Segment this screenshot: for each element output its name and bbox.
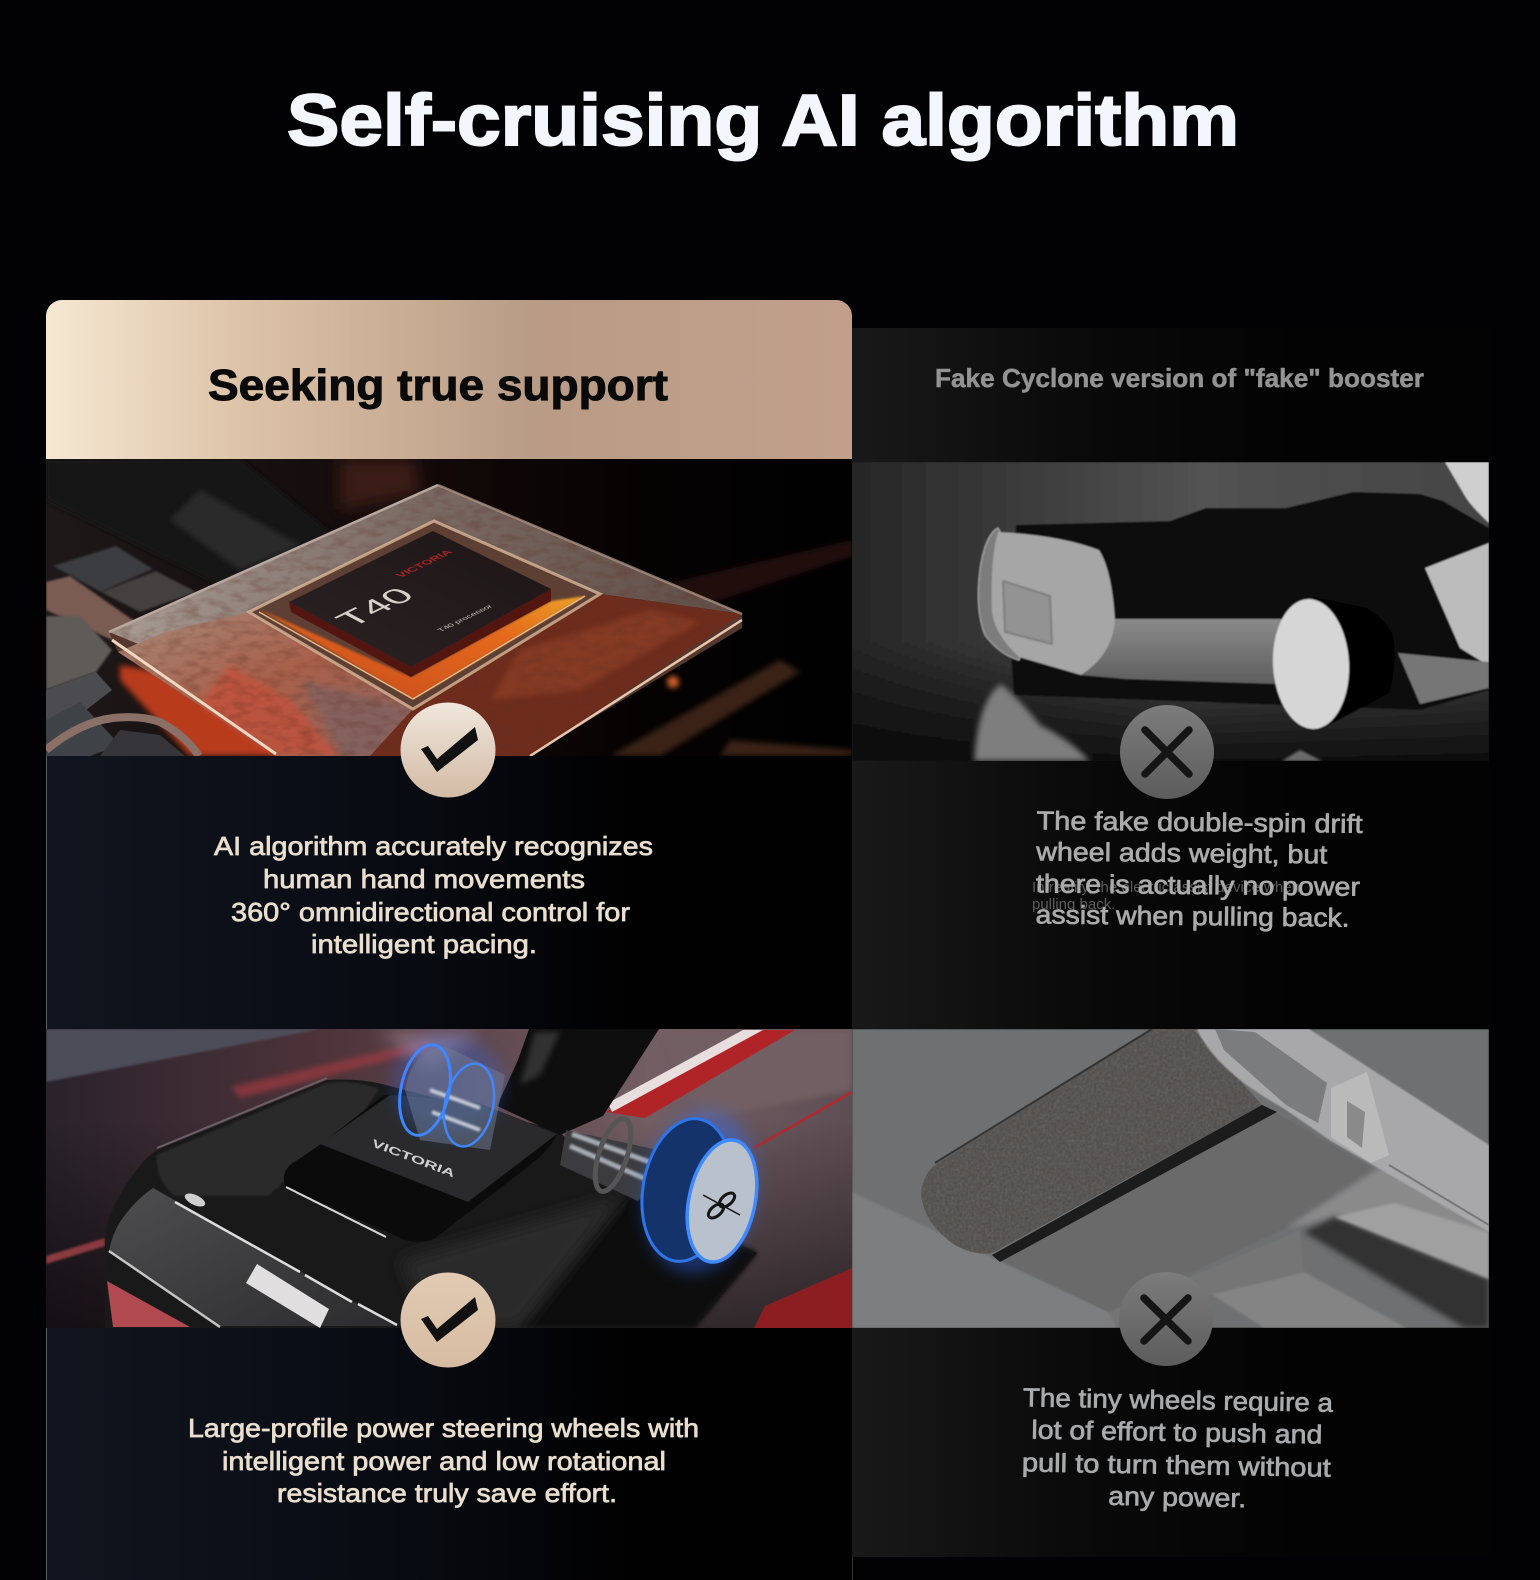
white wheel disc [1270, 597, 1352, 731]
text block: double-spin drift [1034, 805, 1364, 933]
text block: steering wheels: resistance truly save effort. [277, 1478, 617, 1508]
image: small rear wheel [852, 462, 1489, 761]
right background [1286, 1160, 1489, 1232]
icon: cross mark 2 [1119, 1272, 1213, 1366]
bumper [109, 1188, 397, 1326]
text block: tiny wheels: pull to turn them without [1022, 1447, 1332, 1483]
roller [921, 1029, 1262, 1254]
chip [289, 589, 551, 677]
icon: cross mark 1 [1120, 705, 1214, 799]
image: vacuum head with wheels [46, 1029, 852, 1328]
title: Self-cruising AI algorithm [287, 81, 1239, 161]
inner ring and glow [249, 521, 600, 709]
ghost text behind description: pulling back. [1032, 896, 1115, 913]
text block: tiny wheels: any power. [1108, 1481, 1247, 1513]
chip label: T40 [327, 583, 423, 631]
heading: fake booster: Fake Cyclone version of "fake" booster [935, 363, 1424, 393]
heading: seeking true support: Seeking true support [208, 361, 668, 410]
front blue wheel [631, 1102, 769, 1282]
plate underside [109, 614, 742, 756]
text block: steering wheels [188, 1413, 699, 1508]
red and white floor stripe [606, 1030, 795, 1118]
text block: double-spin drift: wheel adds weight, but [1035, 836, 1328, 869]
mottled texture [109, 485, 742, 756]
header band [46, 300, 852, 459]
handle [497, 1029, 659, 1135]
gray lower body [1081, 619, 1286, 684]
center raised cover [284, 1095, 557, 1242]
panel: true support column [46, 300, 852, 1580]
text block: AI algorithm: 360° omnidirectional control for [231, 897, 630, 927]
panel body [852, 328, 1489, 1557]
floor head body [105, 1080, 757, 1328]
white label [246, 1264, 329, 1328]
left plane [852, 1192, 1117, 1328]
under plane [992, 1112, 1376, 1312]
plate upper rim [109, 485, 742, 655]
text block: double-spin drift: assist when pulling back. [1035, 899, 1350, 933]
text block: AI algorithm: human hand movements [263, 864, 585, 894]
plate right zone [370, 594, 742, 756]
text block: AI algorithm: intelligent pacing. [311, 929, 537, 959]
bottom plate [1211, 1272, 1407, 1328]
upper slab [157, 1082, 379, 1196]
rear blue wheel [392, 1035, 505, 1151]
text block: tiny wheels [1021, 1382, 1334, 1515]
glass plate [109, 485, 742, 756]
black body [1010, 492, 1489, 710]
plate lower left zone [118, 612, 413, 756]
image: T40 chip [46, 459, 852, 756]
top right white corner [1445, 462, 1489, 523]
dark band [1304, 1217, 1489, 1328]
ghost text behind description [1032, 879, 1300, 913]
text block: double-spin drift: The fake double-spin drift [1036, 805, 1364, 839]
floor reflections [974, 684, 1090, 761]
ghost text behind description: In reality, the electric assist device when [1032, 879, 1300, 896]
dark red traces, right of the plate [670, 540, 852, 602]
lens edge [976, 526, 1022, 662]
text block: tiny wheels: lot of effort to push and [1031, 1414, 1323, 1450]
right white piece [1425, 543, 1489, 666]
chip red mark: VICTORIA [394, 549, 456, 579]
image: tiny roller wheel [852, 1029, 1489, 1328]
panel body [46, 459, 852, 1580]
wheel hub [1313, 597, 1394, 729]
icon: check mark 1 [400, 702, 496, 798]
chip small print: T40 processor [437, 604, 496, 633]
panel: fake booster column [852, 328, 1489, 1580]
text block: steering wheels: intelligent power and low rotational [222, 1446, 666, 1476]
light housing [1197, 1029, 1489, 1232]
brand mark: VICTORIA [370, 1138, 456, 1180]
text block: double-spin drift: there is actually no power [1036, 868, 1360, 902]
text block: AI algorithm: AI algorithm accurately recognizes [214, 831, 653, 861]
text block: steering wheels: Large-profile power steering wheels with [188, 1413, 699, 1443]
icon: check mark 2 [400, 1272, 496, 1368]
axle [560, 1130, 663, 1201]
text block: AI algorithm [214, 831, 653, 959]
end cap [992, 532, 1115, 675]
text block: tiny wheels: The tiny wheels require a [1023, 1382, 1334, 1418]
